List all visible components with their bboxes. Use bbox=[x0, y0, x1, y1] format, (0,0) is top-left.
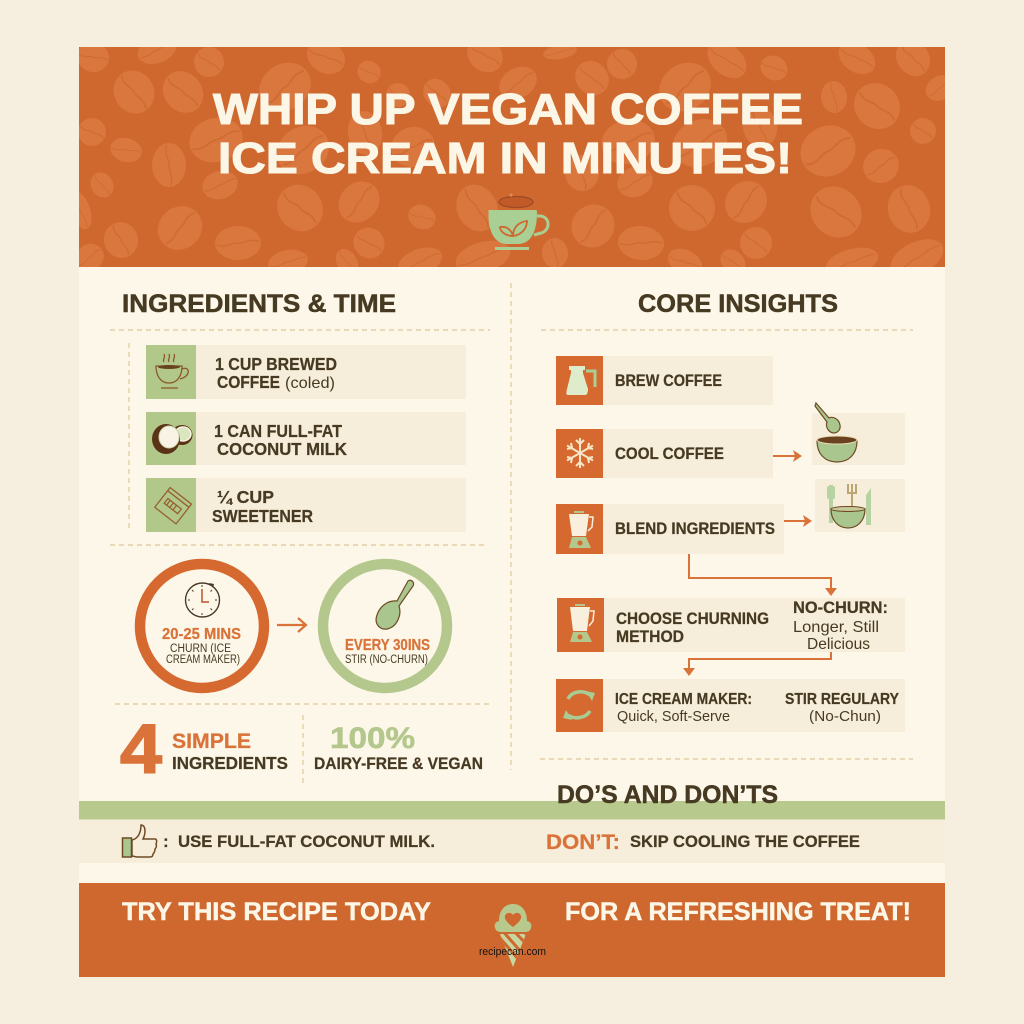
don't: skip cooling the coffee: DON’T: bbox=[546, 831, 620, 854]
stat: 100 percent dairy-free and vegan: DAIRY-FREE & VEGAN bbox=[314, 754, 483, 773]
arrow: churn to stir bbox=[277, 618, 306, 632]
icon: spoon bbox=[376, 580, 414, 629]
step: choose churning method: METHOD bbox=[616, 628, 684, 646]
side panel: bowl and utensils bbox=[815, 479, 905, 532]
chart: churn time circle: CHURN (ICE bbox=[170, 643, 231, 655]
coffee bean pattern bbox=[79, 47, 945, 267]
ingredient: sweetener: ¼ CUP bbox=[217, 487, 274, 507]
title bbox=[213, 85, 803, 183]
icon: ice cream cone bbox=[494, 904, 532, 967]
step: ice cream maker or stir: (No-Chun) bbox=[809, 708, 881, 725]
footer banner: FOR A REFRESHING TREAT! bbox=[565, 898, 911, 926]
title: WHIP UP VEGAN COFFEE bbox=[213, 85, 803, 134]
main panel background bbox=[79, 47, 945, 977]
arrow: to bowl bbox=[773, 450, 802, 462]
stat: 4 simple ingredients: 4 bbox=[120, 710, 162, 788]
step: ice cream maker or stir: STIR REGULARY bbox=[785, 691, 899, 708]
ingredient: coffee: COFFEE bbox=[217, 372, 280, 392]
arrow: to utensils bbox=[784, 515, 812, 527]
panel: core insights flow bbox=[556, 356, 905, 732]
ingredient: coffee bbox=[146, 345, 466, 399]
chart: stir interval circle bbox=[323, 564, 447, 688]
step: cool coffee bbox=[556, 429, 773, 478]
stat: 4 simple ingredients: SIMPLE bbox=[172, 730, 251, 753]
chart: stir interval circle: STIR (NO-CHURN) bbox=[345, 654, 428, 666]
step: blend ingredients: BLEND INGREDIENTS bbox=[615, 520, 775, 538]
step: choose churning method: NO-CHURN: bbox=[793, 599, 888, 617]
panel: ingredients list bbox=[146, 345, 466, 532]
stat: 4 simple ingredients: INGREDIENTS bbox=[172, 753, 288, 773]
divider lines bbox=[110, 283, 913, 786]
step: choose churning method bbox=[557, 598, 905, 653]
stat: 100 percent dairy-free and vegan: 100% bbox=[330, 722, 415, 755]
ingredient: coconut milk: COCONUT MILK bbox=[217, 439, 347, 459]
step: ice cream maker or stir: ICE CREAM MAKER: bbox=[615, 691, 752, 708]
footer banner bbox=[79, 883, 945, 977]
connector: no-churn to options bbox=[683, 652, 831, 676]
step: brew coffee bbox=[556, 356, 773, 405]
icon: thumbs up bbox=[122, 825, 157, 857]
heading: ingredients and time: INGREDIENTS & TIME bbox=[122, 290, 396, 318]
ingredient: coffee: 1 CUP BREWED bbox=[215, 354, 337, 374]
chart: churn time circle: 20-25 MINS bbox=[162, 626, 241, 643]
watermark: recipecan.com bbox=[479, 946, 546, 958]
title: ICE CREAM IN MINUTES! bbox=[218, 134, 792, 183]
heading: do's and don'ts: DO’S AND DON’TS bbox=[557, 781, 778, 809]
footer banner: TRY THIS RECIPE TODAY bbox=[122, 898, 431, 926]
header banner bbox=[79, 47, 945, 267]
ingredient: sweetener: SWEETENER bbox=[212, 506, 313, 526]
chart: churn time circle bbox=[140, 564, 264, 688]
ingredient: coffee: (coled) bbox=[285, 375, 335, 392]
side panel: spoon and bowl bbox=[812, 403, 905, 465]
step: blend ingredients bbox=[556, 504, 784, 554]
step: choose churning method: Longer, Still bbox=[793, 619, 879, 636]
ingredient: coconut milk: 1 CAN FULL-FAT bbox=[214, 421, 342, 441]
ingredient: coconut milk bbox=[146, 412, 466, 465]
do: use full-fat coconut milk: : bbox=[163, 832, 169, 851]
icon: clock bbox=[186, 583, 220, 617]
don't: skip cooling the coffee bbox=[546, 831, 860, 854]
do: use full-fat coconut milk bbox=[122, 825, 435, 857]
stat: 4 simple ingredients bbox=[120, 710, 288, 788]
step: cool coffee: COOL COFFEE bbox=[615, 445, 724, 463]
heading: core insights: CORE INSIGHTS bbox=[638, 290, 838, 318]
stat: 100 percent dairy-free and vegan bbox=[314, 722, 483, 773]
do: use full-fat coconut milk: USE FULL-FAT COCONUT MILK. bbox=[178, 832, 435, 851]
step: choose churning method: CHOOSE CHURNING bbox=[616, 610, 769, 628]
ingredient: sweetener bbox=[146, 478, 466, 532]
step: brew coffee: BREW COFFEE bbox=[615, 372, 722, 390]
chart: stir interval circle: EVERY 30INS bbox=[345, 637, 430, 654]
step: ice cream maker or stir bbox=[556, 679, 905, 732]
don't: skip cooling the coffee: SKIP COOLING THE COFFEE bbox=[630, 833, 860, 851]
step: ice cream maker or stir: Quick, Soft-Serve bbox=[617, 708, 730, 725]
icon: green coffee cup bbox=[488, 193, 548, 250]
band: do's and don'ts background bbox=[79, 801, 945, 863]
chart: churn time circle: CREAM MAKER) bbox=[166, 654, 240, 666]
step: choose churning method: Delicious bbox=[807, 636, 870, 653]
connector: blend to no-churn bbox=[689, 554, 837, 596]
infographic canvas bbox=[79, 47, 945, 977]
